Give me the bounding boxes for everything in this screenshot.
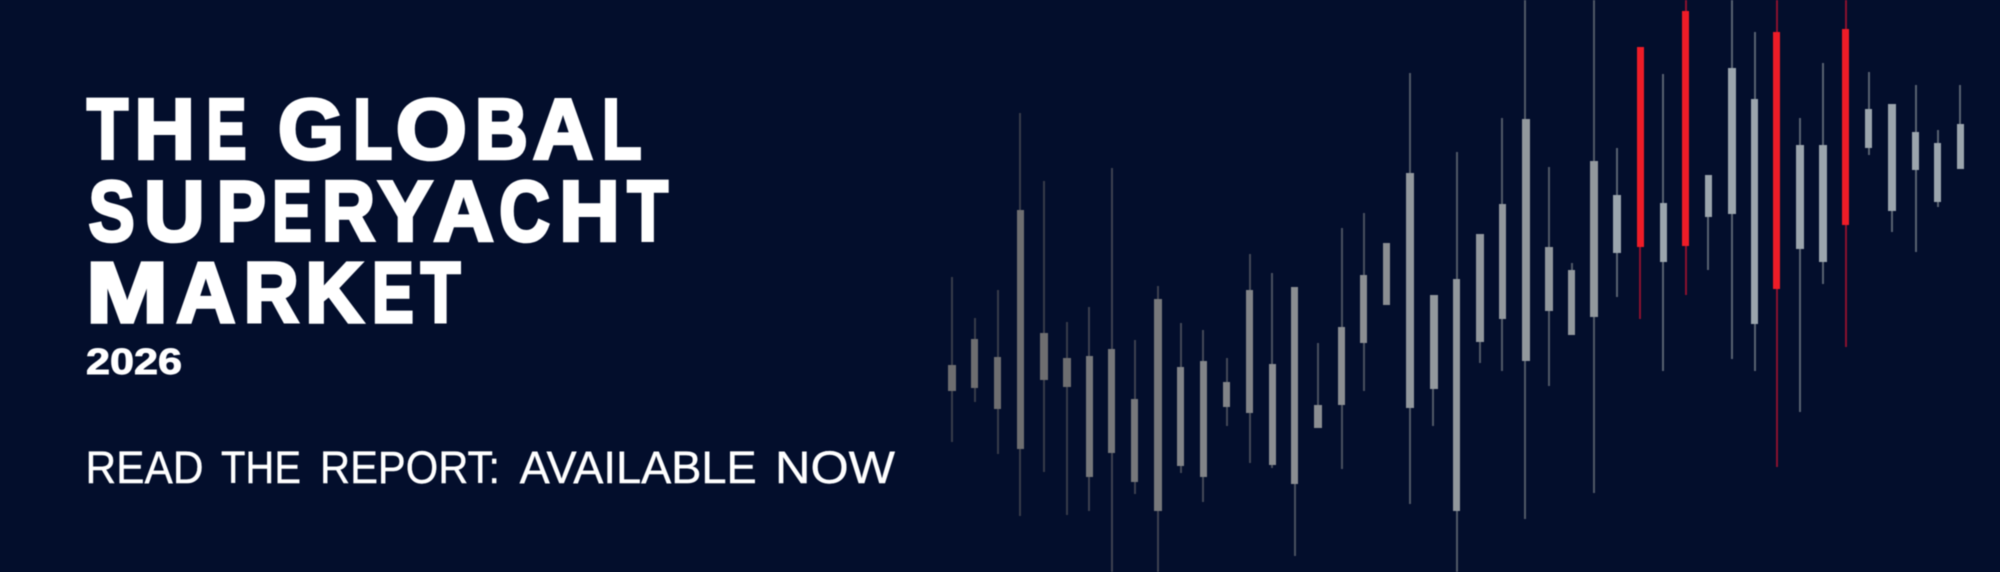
candle without wick xyxy=(1383,243,1390,305)
title xyxy=(86,82,668,341)
title: U xyxy=(144,164,205,260)
title: H xyxy=(134,82,195,178)
title: T xyxy=(627,164,668,260)
title: K xyxy=(305,246,363,341)
title: O xyxy=(396,82,467,178)
call to action: AVAILABLE xyxy=(520,442,757,493)
title: H xyxy=(559,164,620,260)
title: R xyxy=(322,164,375,260)
call to action: THE xyxy=(221,442,301,493)
title: Y xyxy=(378,164,432,260)
call to action: REPORT: xyxy=(320,442,500,493)
highlighted red candle xyxy=(1682,0,1689,295)
call to action: NOW xyxy=(775,442,896,493)
title: A xyxy=(176,246,235,341)
title: E xyxy=(272,164,312,260)
title: L xyxy=(353,82,392,178)
title: M xyxy=(86,246,168,341)
candlestick chart xyxy=(948,0,1964,572)
year: 2026 xyxy=(86,341,182,382)
title: A xyxy=(533,82,593,178)
highlighted red candle xyxy=(1773,0,1780,467)
title: E xyxy=(372,246,414,341)
title: S xyxy=(89,164,135,260)
title: L xyxy=(602,82,642,178)
title: P xyxy=(217,164,266,260)
title: A xyxy=(434,164,494,260)
highlighted red candle xyxy=(1842,0,1849,347)
highlighted red candle xyxy=(1637,47,1644,319)
title: B xyxy=(475,82,528,178)
title: T xyxy=(87,82,128,178)
title: T xyxy=(421,246,460,341)
title: G xyxy=(278,82,344,178)
title: R xyxy=(244,246,299,341)
title: E xyxy=(206,82,246,178)
call to action: READ xyxy=(86,442,204,493)
title: C xyxy=(499,164,550,260)
